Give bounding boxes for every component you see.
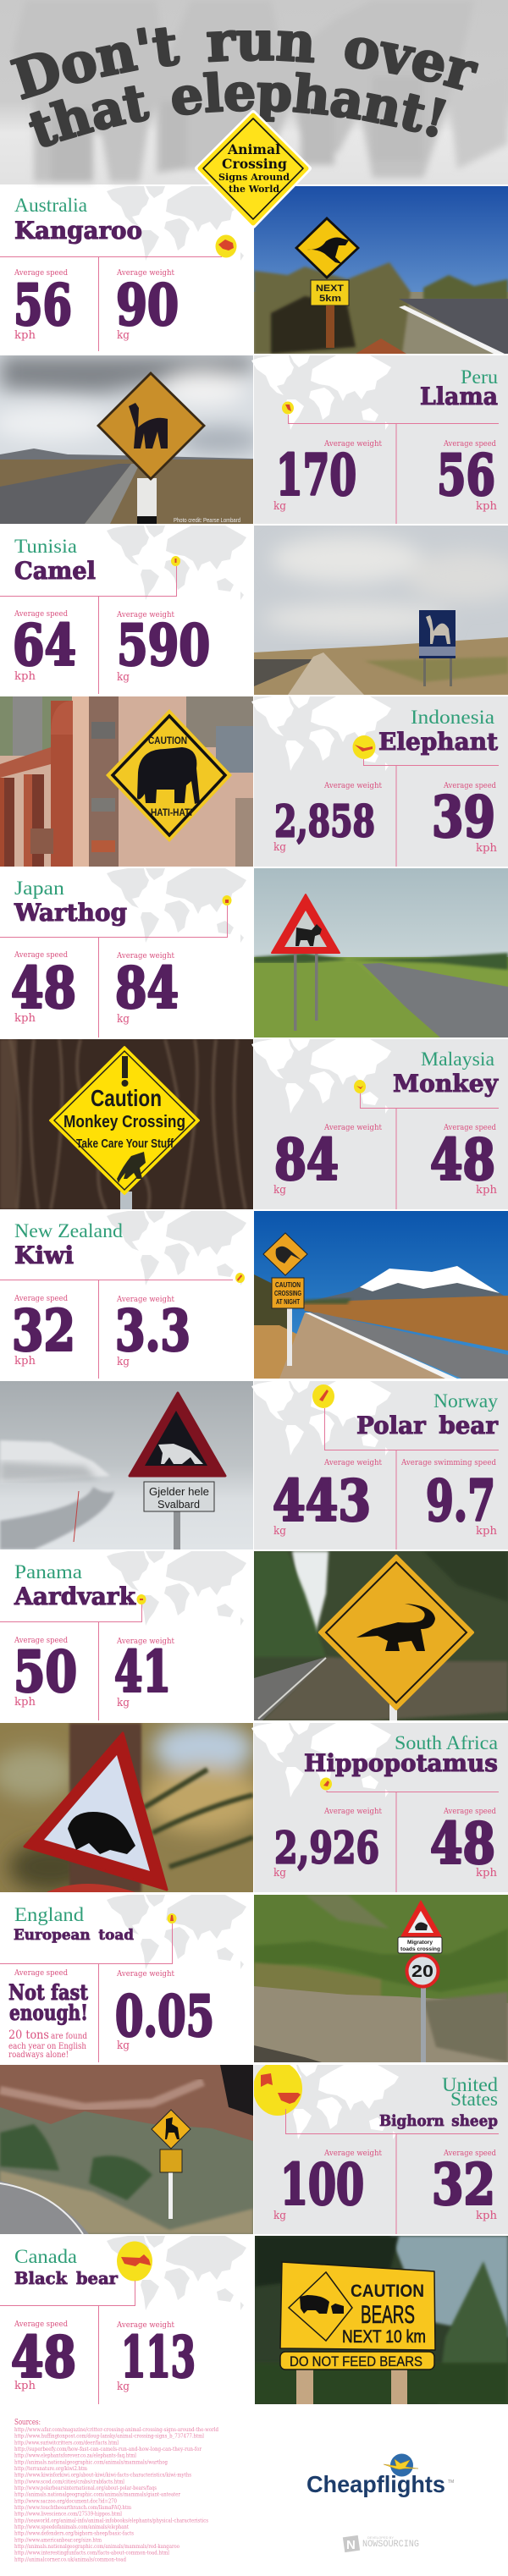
stat: weight: 443 xyxy=(273,1467,371,1533)
stat: weight: kg xyxy=(117,1013,130,1026)
stat: speed: each year on English xyxy=(8,2042,86,2051)
panel: Indonesia elephant xyxy=(251,696,508,867)
sign: Gjelder hele xyxy=(149,1485,209,1498)
location pin xyxy=(117,2241,152,2282)
stat: weight: 2,858 xyxy=(274,797,375,848)
stat: speed: roadways alone! xyxy=(8,2050,69,2060)
stat: speed: Average speed xyxy=(14,1968,68,1978)
stat: weight: kg xyxy=(273,1867,286,1880)
animal name: Monkey xyxy=(393,1070,499,1098)
stat: speed: 48 xyxy=(11,2324,76,2390)
stat: weight: Average weight xyxy=(116,610,174,619)
photo: llama sign xyxy=(0,355,253,524)
sign xyxy=(398,1901,442,2062)
stat: speed: 48 xyxy=(430,1127,495,1193)
photo: kangaroo sign xyxy=(254,186,508,354)
stat: weight: 590 xyxy=(117,613,210,679)
panel: Norway polar bear xyxy=(251,1381,508,1549)
stat: weight xyxy=(273,1807,382,1880)
stat: speed: kph xyxy=(476,1867,498,1880)
stat: weight: kg xyxy=(273,841,286,854)
developed by: DEVELOPED BY xyxy=(367,2535,394,2540)
panel: Tunisia camel xyxy=(0,526,246,694)
stat: weight: kg xyxy=(117,1697,130,1709)
location pin xyxy=(254,2065,302,2116)
rules xyxy=(327,1791,499,1892)
badge: Animal Crossing Signs Around the World: the World xyxy=(229,184,279,195)
sign: 20 xyxy=(411,1962,433,1981)
country: New Zealand xyxy=(14,1220,124,1241)
stat: weight: kg xyxy=(117,671,130,684)
sign: AT NIGHT xyxy=(276,1298,300,1306)
badge: Animal Crossing Signs Around the World: Crossing xyxy=(222,156,287,172)
map xyxy=(107,1211,246,1285)
icon: N mark: N xyxy=(346,2538,356,2552)
source links: http://terranature.org/kiwi2.htm xyxy=(14,2465,87,2472)
map xyxy=(251,1039,391,1114)
sign xyxy=(50,1047,199,1209)
sign: CAUTION xyxy=(148,735,187,746)
sign xyxy=(263,1233,307,1366)
location pin xyxy=(354,1080,366,1093)
country: Panama xyxy=(14,1561,82,1582)
stat: speed: 50 xyxy=(14,1638,77,1704)
source links: http://www.speedofanimals.com/animals/elephant xyxy=(14,2524,129,2530)
stat: speed xyxy=(14,268,72,342)
animal name: Polar bear xyxy=(356,1412,499,1439)
stat: weight: 84 xyxy=(274,1127,339,1193)
stat: weight: Average weight xyxy=(116,1295,174,1304)
animal name: Camel xyxy=(14,557,96,585)
location pin xyxy=(312,1384,334,1408)
rules xyxy=(361,1093,499,1209)
animal name: European toad xyxy=(14,1927,134,1944)
photo: warthog sign xyxy=(254,868,508,1038)
stat: speed: kph xyxy=(14,1355,36,1368)
map xyxy=(107,526,246,600)
panel background xyxy=(254,2065,508,2234)
trademark: TM xyxy=(448,2480,454,2485)
title: Don't run over xyxy=(10,27,479,100)
wordmark: Cheapflights xyxy=(306,2471,445,2497)
map xyxy=(107,1551,246,1626)
sign: Take Care Your Stuff xyxy=(76,1137,174,1151)
logo: Cheapflights xyxy=(306,2454,454,2497)
stat: speed: Average speed xyxy=(14,950,68,960)
stat: weight: Average weight xyxy=(116,2320,174,2330)
country: Australia xyxy=(14,195,87,216)
photo: monkey sign xyxy=(0,1039,253,1209)
stat: speed: Average speed xyxy=(14,609,68,619)
photo: polar bear sign xyxy=(0,1381,253,1549)
stat: speed: 32 xyxy=(12,1298,75,1364)
country: Indonesia xyxy=(411,707,494,728)
panel background xyxy=(254,1039,508,1209)
stat: weight: 113 xyxy=(121,2324,196,2390)
source links: http://www.kiwisforkiwi.org/about-kiwi/kiwi-facts-characteristics/kiwi-myths xyxy=(14,2472,191,2479)
animal name: Warthog xyxy=(14,899,127,927)
panel: South Africa hippopotamus xyxy=(251,1723,508,1892)
sign: DO NOT FEED BEARS xyxy=(290,2353,422,2370)
stat: weight: kg xyxy=(273,1525,286,1538)
sources heading: Sources: xyxy=(14,2419,41,2427)
stat: speed: 56 xyxy=(14,272,72,339)
stat: weight: Average weight xyxy=(323,1123,382,1132)
stat: weight: kg xyxy=(117,1356,130,1368)
map xyxy=(107,868,246,943)
country: Peru xyxy=(461,366,499,388)
source links: http://www.livescience.com/27539-hippos.html xyxy=(14,2511,122,2518)
map xyxy=(107,186,246,261)
source links: http://superbeefy.com/how-fast-can-camels-run-and-how-long-can-they-run-for xyxy=(14,2446,202,2452)
stat: speed: Average speed xyxy=(443,1807,496,1816)
source links: http://animalcorner.co.uk/animals/common-toad xyxy=(14,2556,126,2562)
sign: HATI-HATI xyxy=(151,806,192,818)
sign xyxy=(280,2262,435,2404)
stat: weight: Average weight xyxy=(323,1807,382,1816)
header: elephant herd background xyxy=(0,0,508,184)
sign: CAUTION xyxy=(351,2282,424,2301)
panel: Malaysia monkey xyxy=(251,1039,508,1209)
source links: http://animals.nationalgeographic.com/animals/mammals/warthog xyxy=(14,2458,168,2465)
stat: speed: 32 xyxy=(432,2151,495,2217)
badge: Animal Crossing Signs Around the World xyxy=(197,113,309,226)
sign xyxy=(97,372,206,524)
source links: http://www.defenders.org/bighorn-sheep/basic-facts xyxy=(14,2530,134,2537)
stat: weight xyxy=(115,1969,214,2052)
sign: CROSSING xyxy=(274,1290,301,1297)
stat: weight: Average weight xyxy=(323,2149,382,2158)
panel background xyxy=(254,696,508,867)
panel: Japan warthog xyxy=(0,868,246,1038)
panel background xyxy=(254,1381,508,1549)
map xyxy=(251,696,391,771)
sign: 5km xyxy=(319,294,341,304)
source links xyxy=(14,2426,218,2562)
stat: weight: kg xyxy=(273,2210,286,2222)
stat: weight: 100 xyxy=(280,2151,364,2217)
sign: BEARS xyxy=(361,2301,415,2329)
stat: speed: Average speed xyxy=(443,2149,496,2158)
stat: weight: 41 xyxy=(114,1638,171,1704)
stat: weight: Average weight xyxy=(116,268,174,278)
source links: http://www.americanbear.org/size.htm xyxy=(14,2536,102,2543)
source links: http://animals.nationalgeographic.com/animals/mammals/giant-anteater xyxy=(14,2491,181,2498)
stat: speed: 20 tons xyxy=(8,2028,49,2042)
stat: speed xyxy=(8,1968,88,2060)
rules xyxy=(0,256,222,351)
rules xyxy=(325,1408,499,1549)
panel: Australia kangaroo xyxy=(0,186,246,351)
sign xyxy=(130,1393,225,1549)
stat: speed: kph xyxy=(14,1696,36,1709)
sign xyxy=(320,1556,472,1720)
stat: speed: Average speed xyxy=(14,2320,68,2329)
sign xyxy=(152,2110,190,2219)
country: United xyxy=(442,2074,499,2095)
stat: weight: Average weight xyxy=(323,781,382,790)
country: South Africa xyxy=(395,1732,498,1753)
stat: speed: Average speed xyxy=(14,268,68,278)
source links: http://www.suriwitcritters.com/deer/facts.html xyxy=(14,2439,119,2446)
photo: camel sign xyxy=(254,526,508,695)
rules xyxy=(286,2109,499,2234)
credit: NowSourcing xyxy=(343,2535,419,2552)
map xyxy=(251,1723,391,1797)
map xyxy=(259,2065,399,2139)
stat: speed: are found xyxy=(51,2032,88,2041)
stat: speed: Average speed xyxy=(443,439,496,449)
source links: http://www.interestingfunfacts.com/facts-about-common-toad.html xyxy=(14,2550,169,2557)
stat: swimming speed xyxy=(400,1458,498,1538)
map xyxy=(251,355,391,430)
panel: Canada black bear xyxy=(0,2236,246,2404)
photo: hippo sign xyxy=(0,1723,253,1892)
rules xyxy=(0,566,176,694)
location pin xyxy=(320,1777,332,1791)
stat: speed: kph xyxy=(476,1184,498,1197)
stat: speed: kph xyxy=(14,1012,36,1025)
sign xyxy=(295,217,360,348)
map xyxy=(107,2236,246,2310)
stat: speed: Average speed xyxy=(443,1123,496,1132)
stat: speed: kph xyxy=(14,2380,36,2392)
animal name: Kiwi xyxy=(14,1241,74,1269)
stat: speed: 64 xyxy=(13,613,76,679)
stat: swimming speed: Average swimming speed xyxy=(400,1458,496,1467)
photo: toad sign xyxy=(254,1895,508,2062)
photo credit: Photo credit: Pearse Lombard xyxy=(174,518,240,524)
stat: weight xyxy=(116,2320,196,2393)
source links: http://www.polarbearsinternational.org/about-polar-bears/faqs xyxy=(14,2485,157,2491)
source links: http://www.elephantsforever.co.za/elephants-faq.html xyxy=(14,2452,136,2459)
sign xyxy=(106,709,232,842)
location pin xyxy=(215,235,237,257)
stat: swimming speed: kph xyxy=(476,1525,498,1538)
rules xyxy=(0,1604,142,1720)
source links: http://www.saczoo.org/document.doc?id=270 xyxy=(14,2497,117,2504)
sign: Monkey Crossing xyxy=(64,1113,185,1131)
sign: NEXT xyxy=(316,283,344,294)
location pin xyxy=(137,1594,146,1604)
source links: http://animals.nationalgeographic.com/animals/mammals/red-kangaroo xyxy=(14,2543,179,2550)
rules xyxy=(288,415,499,524)
location pin xyxy=(352,735,376,759)
stat: weight: Average weight xyxy=(116,951,174,960)
sign: Svalbard xyxy=(157,1498,200,1511)
animal name: Hippopotamus xyxy=(304,1749,498,1777)
stat: speed: kph xyxy=(476,842,498,855)
stat: weight: kg xyxy=(117,329,130,342)
stat: speed: Average speed xyxy=(14,1636,68,1645)
stat: weight: Average weight xyxy=(323,1458,382,1467)
stat: speed: kph xyxy=(476,2210,498,2222)
animal name: Elephant xyxy=(378,728,498,756)
country: Malaysia xyxy=(421,1049,494,1070)
source links: http://www.scod.com/cities/crabs/crabfacts.html xyxy=(14,2478,124,2485)
location pin xyxy=(222,895,232,905)
animal name: Bighorn sheep xyxy=(379,2112,498,2130)
photo: kiwi sign xyxy=(254,1211,508,1379)
stat: speed: Average speed xyxy=(443,781,496,790)
stat: weight: kg xyxy=(117,2381,130,2393)
animal name: Aardvark xyxy=(14,1582,136,1610)
sign: toads crossing xyxy=(400,1946,440,1952)
rules xyxy=(0,1280,233,1379)
stat: weight: 90 xyxy=(116,272,179,339)
animal name: Kangaroo xyxy=(14,217,142,245)
badge: Animal Crossing Signs Around the World: Animal xyxy=(227,141,280,157)
photo: aardvark sign xyxy=(254,1551,508,1720)
photo: elephant sign xyxy=(0,696,253,867)
badge: Animal Crossing Signs Around the World: Signs Around xyxy=(218,172,290,183)
stat: weight: 170 xyxy=(276,442,356,508)
stat: weight: 0.05 xyxy=(115,1984,214,2050)
rules xyxy=(0,2281,135,2404)
country second line: States xyxy=(450,2089,498,2110)
map xyxy=(107,1895,246,1969)
location pin xyxy=(171,556,180,566)
stat: weight: kg xyxy=(117,2039,130,2052)
title xyxy=(10,27,479,147)
stat: speed: enough! xyxy=(9,2001,88,2025)
sources list xyxy=(14,2419,218,2562)
stat: speed: 48 xyxy=(430,1811,495,1877)
location pin xyxy=(235,1273,245,1283)
stat: weight: 3.3 xyxy=(115,1298,190,1364)
stat: speed: kph xyxy=(14,329,36,342)
nowsourcing wordmark: NOWSOURCING xyxy=(362,2540,419,2550)
source links: http://www.huffingtonpost.com/doug-lansky/animal-crossing-signs_b_737477.html xyxy=(14,2433,204,2440)
stat: weight: kg xyxy=(273,1184,286,1197)
country: Norway xyxy=(433,1390,499,1412)
location pin xyxy=(282,401,294,415)
stat: speed: kph xyxy=(14,670,36,683)
stat: weight: Average weight xyxy=(116,1637,174,1646)
sign: Migratory xyxy=(407,1940,433,1946)
map xyxy=(251,1381,391,1456)
stat: weight: kg xyxy=(273,500,286,513)
icon: globe and plane xyxy=(384,2454,418,2476)
panel background xyxy=(254,355,508,524)
panel: Panama aardvark xyxy=(0,1551,246,1720)
sign xyxy=(272,894,340,1031)
stat: weight: Average weight xyxy=(323,439,382,449)
country: Canada xyxy=(14,2246,77,2267)
panel: New Zealand kiwi xyxy=(0,1211,246,1379)
location pin xyxy=(168,1913,176,1924)
title: that elephant! xyxy=(29,71,447,147)
stat: weight: Average weight xyxy=(116,1969,174,1979)
stat: speed: Average speed xyxy=(14,1294,68,1303)
stat: weight xyxy=(273,1123,382,1197)
panel: England European toad xyxy=(0,1895,246,2062)
rules xyxy=(0,905,227,1038)
source links: http://www.afar.com/magazine/critter-crossing-animal-crossing-signs-around-the-world xyxy=(14,2426,218,2433)
source links: http://seaworld.org/animal-info/animal-infobooks/elephants/physical-characteristics xyxy=(14,2517,208,2524)
stat: speed: 39 xyxy=(432,784,495,850)
animal name: Llama xyxy=(420,383,498,410)
stat: speed: kph xyxy=(476,500,498,513)
panel background xyxy=(254,1723,508,1892)
rules xyxy=(364,759,499,867)
sign: Caution xyxy=(91,1085,162,1111)
photo: bighorn sheep sign xyxy=(0,2065,253,2234)
panel: United States bighorn sheep xyxy=(253,2061,508,2234)
stat: weight xyxy=(273,781,382,854)
rules xyxy=(0,1924,173,2062)
panel: Peru llama xyxy=(251,355,508,524)
country: Tunisia xyxy=(14,536,77,557)
country: Japan xyxy=(14,878,65,899)
sign xyxy=(25,1733,167,1890)
photo: bear sign xyxy=(255,2236,508,2404)
country: England xyxy=(14,1904,85,1925)
stat: weight: 84 xyxy=(115,955,179,1021)
sign xyxy=(419,610,456,686)
sign: NEXT 10 km xyxy=(342,2327,426,2347)
stat: speed: Not fast xyxy=(8,1980,88,2005)
animal name: Black bear xyxy=(14,2268,118,2288)
sign: CAUTION xyxy=(275,1281,301,1289)
stat: weight: 2,926 xyxy=(274,1823,379,1874)
stat: speed: 48 xyxy=(11,955,76,1021)
source links: http://www.touchtheearthranch.com/llamaFAQ.htm xyxy=(14,2504,131,2511)
